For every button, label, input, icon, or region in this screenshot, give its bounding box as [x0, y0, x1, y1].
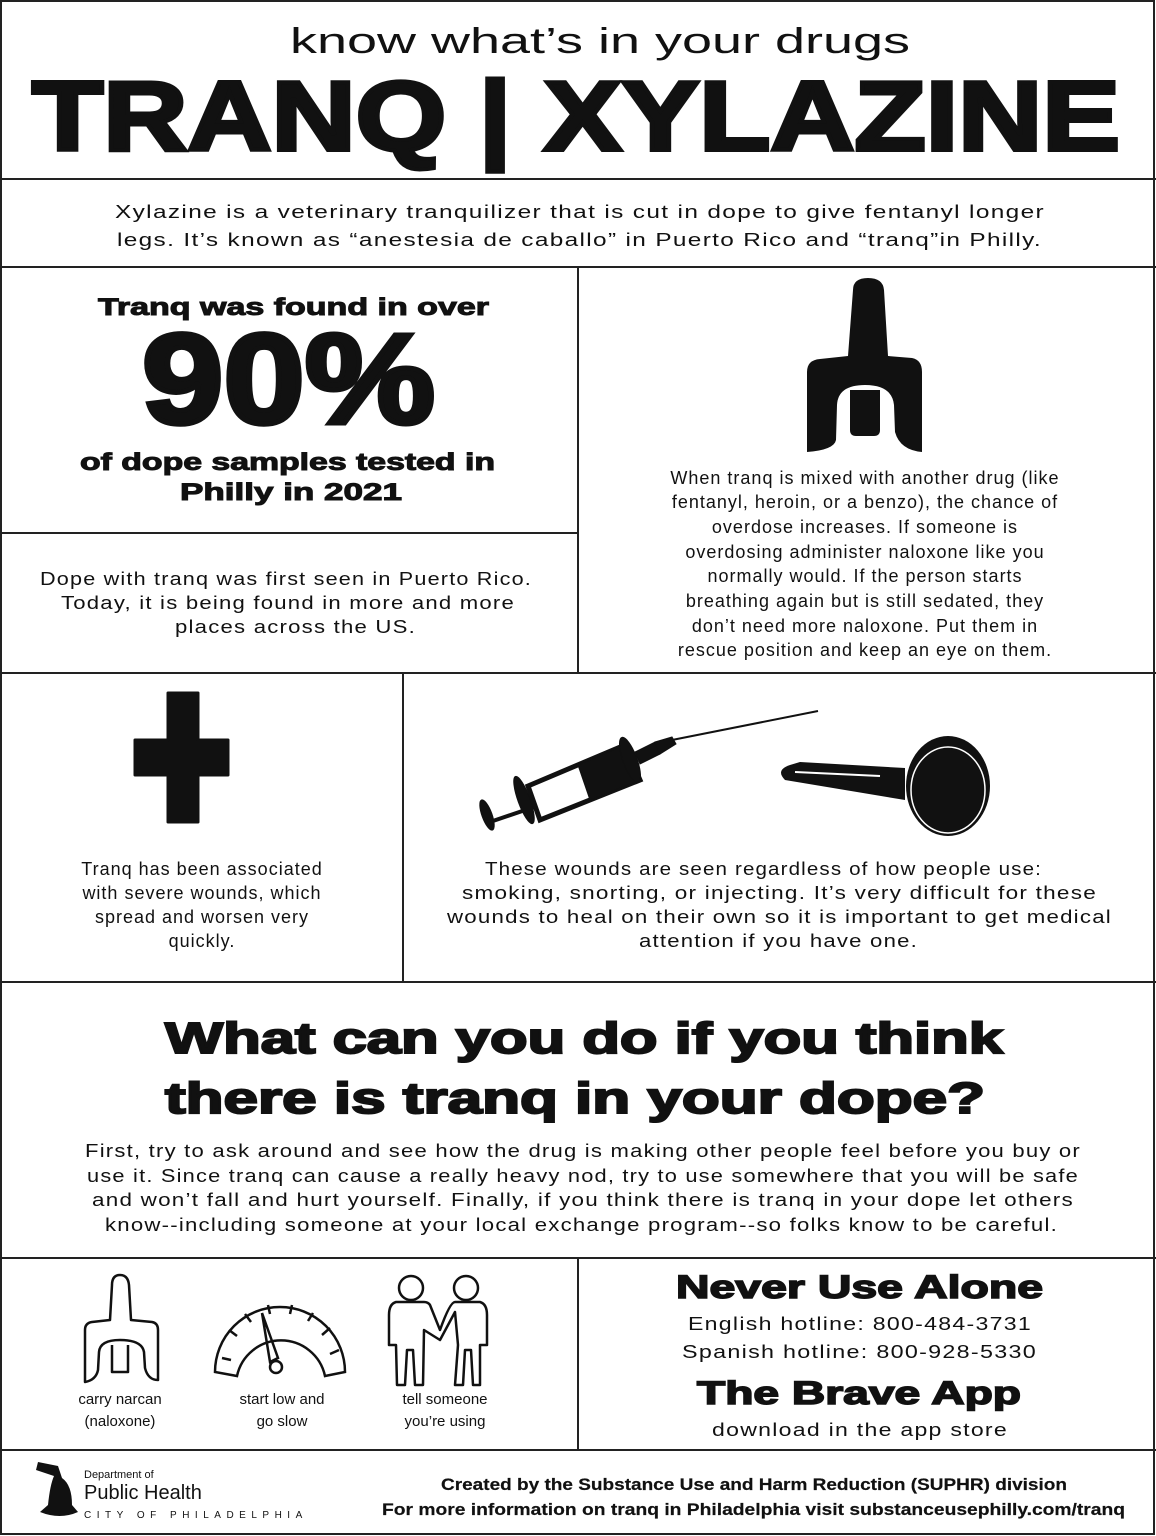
- text: advice paragraph: First, try to ask around and see how the drug is making other people feel before you buy or: [85, 1141, 1081, 1161]
- text: naloxone advice: normally would. If the person starts: [707, 566, 1023, 586]
- heading: what can you do: [165, 1014, 1004, 1123]
- text: wounds heal: wounds to heal on their own so it is important to get medical: [446, 907, 1112, 927]
- panel: hotlines: Never Use Alone: [676, 1269, 1043, 1305]
- text: wounds heal: smoking, snorting, or injecting. It’s very difficult for these: [462, 883, 1097, 903]
- icon labels: go slow: [257, 1413, 308, 1430]
- text: wounds: quickly.: [169, 931, 235, 951]
- stat: 90%: Philly in 2021: [180, 479, 402, 506]
- icon: medical cross: [135, 693, 228, 822]
- intro text: legs. It’s known as “anestesia de caballo” in Puerto Rico and “tranq”in Philly.: [117, 230, 1042, 250]
- text: naloxone advice: don’t need more naloxone. Put them in: [692, 616, 1038, 636]
- text: advice paragraph: use it. Since tranq can cause a really heavy nod, try to use somewhere that you will be safe: [87, 1166, 1079, 1186]
- text: naloxone advice: [670, 468, 1060, 660]
- icon: syringe: [477, 711, 818, 832]
- footer credits: Created by the Substance Use and Harm Reduction (SUPHR) division: [441, 1475, 1067, 1494]
- icon: cooker spoon: [781, 736, 990, 836]
- panel: hotlines: download in the app store: [712, 1420, 1008, 1440]
- logo: public health: [36, 1462, 308, 1521]
- text: wounds heal: attention if you have one.: [639, 931, 918, 951]
- heading: what can you do: there is tranq in your dope?: [165, 1074, 985, 1123]
- text: Puerto Rico: places across the US.: [175, 617, 416, 637]
- panel: hotlines: Spanish hotline: 800-928-5330: [682, 1342, 1037, 1362]
- text: Puerto Rico: Today, it is being found in more and more: [61, 593, 515, 613]
- text: advice paragraph: [85, 1141, 1081, 1235]
- text: wounds heal: [446, 859, 1112, 951]
- icon labels: (naloxone): [85, 1413, 155, 1430]
- icon: two people: [389, 1276, 487, 1385]
- stat: 90%: 90%: [142, 308, 435, 451]
- title: TRANQ | XYLAZINE: [32, 61, 1120, 173]
- subtitle: know what’s in your drugs: [290, 20, 910, 61]
- logo: public health: CITY OF PHILADELPHIA: [84, 1510, 308, 1521]
- icon labels: start low and: [239, 1391, 325, 1408]
- text: advice paragraph: know--including someone at your local exchange program--so folks know to be careful.: [105, 1215, 1058, 1235]
- icon labels: tell someone: [402, 1391, 488, 1408]
- text: wounds: Tranq has been associated: [81, 859, 323, 879]
- icon labels: carry narcan: [78, 1391, 162, 1408]
- stat: 90%: Tranq was found in over: [98, 294, 489, 321]
- stat: 90%: [80, 294, 495, 506]
- panel: hotlines: [676, 1269, 1043, 1440]
- stat: 90%: of dope samples tested in: [80, 449, 495, 476]
- text: Puerto Rico: [40, 569, 532, 637]
- icon: narcan filled: [807, 278, 922, 452]
- text: wounds: [81, 859, 323, 951]
- text: naloxone advice: fentanyl, heroin, or a benzo), the chance of: [672, 492, 1058, 512]
- panel: hotlines: The Brave App: [697, 1375, 1021, 1411]
- text: wounds: spread and worsen very: [95, 907, 309, 927]
- logo: public health: Department of: [84, 1469, 155, 1481]
- text: wounds: with severe wounds, which: [81, 883, 322, 903]
- text: advice paragraph: and won’t fall and hurt yourself. Finally, if you think there is tranq in your dope let others: [92, 1190, 1074, 1210]
- heading: what can you do: What can you do if you think: [165, 1014, 1004, 1063]
- text: naloxone advice: overdosing administer naloxone like you: [685, 542, 1045, 562]
- icon: narcan outline: [85, 1275, 158, 1382]
- text: naloxone advice: rescue position and keep an eye on them.: [678, 640, 1052, 660]
- text: naloxone advice: overdose increases. If someone is: [712, 517, 1018, 537]
- panel: hotlines: English hotline: 800-484-3731: [688, 1314, 1032, 1334]
- intro text: Xylazine is a veterinary tranquilizer that is cut in dope to give fentanyl longer: [115, 202, 1045, 222]
- icon labels: [78, 1391, 488, 1430]
- text: Puerto Rico: Dope with tranq was first seen in Puerto Rico.: [40, 569, 532, 589]
- footer credits: [382, 1475, 1125, 1519]
- text: naloxone advice: breathing again but is still sedated, they: [686, 591, 1044, 611]
- footer credits: For more information on tranq in Philadelphia visit substanceusephilly.com/tranq: [382, 1500, 1125, 1519]
- intro text: [115, 202, 1045, 250]
- text: wounds heal: These wounds are seen regardless of how people use:: [485, 859, 1042, 879]
- icon labels: you’re using: [405, 1413, 485, 1430]
- text: naloxone advice: When tranq is mixed with another drug (like: [670, 468, 1060, 488]
- logo: public health: Public Health: [84, 1482, 202, 1504]
- icon: speedometer: [215, 1305, 345, 1376]
